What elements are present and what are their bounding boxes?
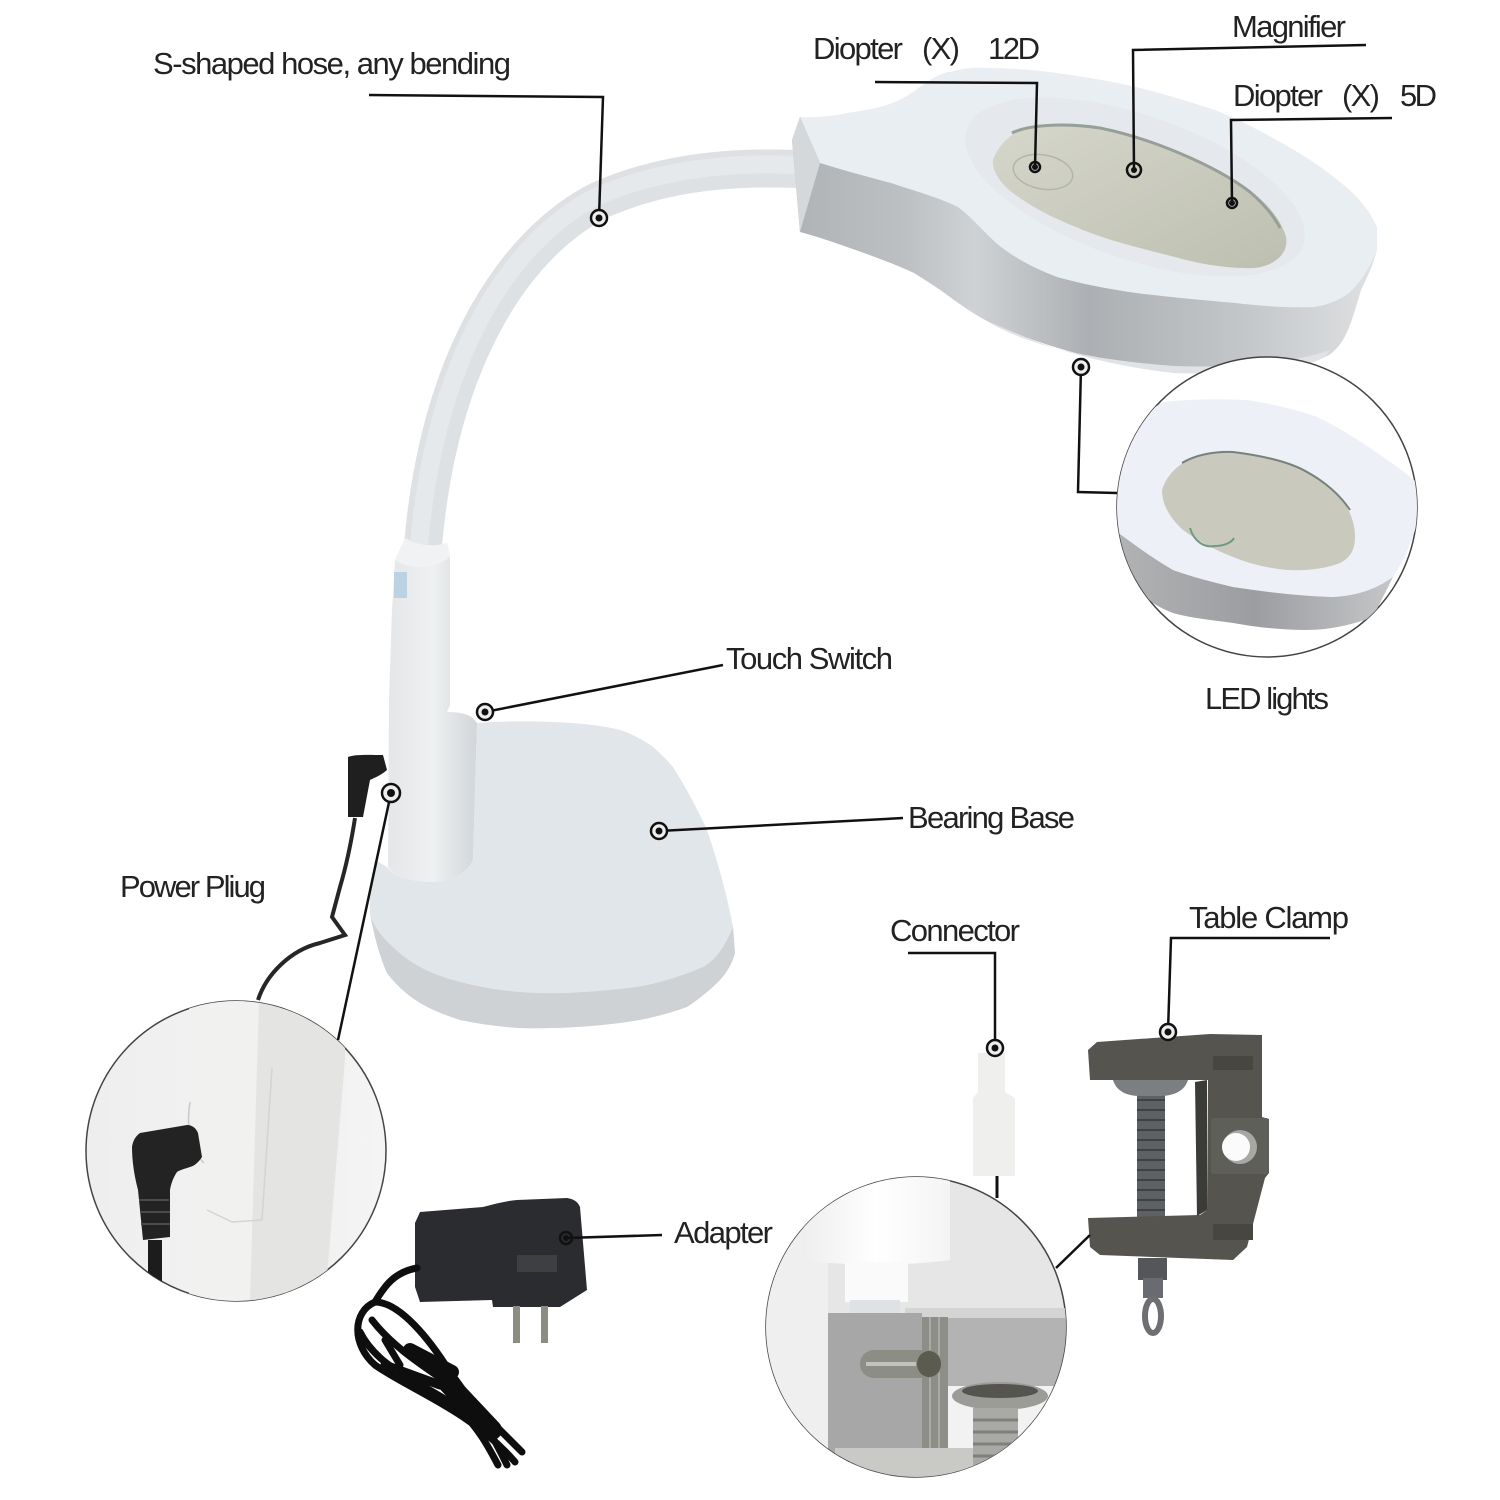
leader: Power Plug <box>338 784 400 1040</box>
power socket inset <box>86 1000 386 1302</box>
top surface <box>800 68 1377 307</box>
label: Magnifier: Magnifier <box>1232 9 1346 44</box>
sleeve <box>845 1262 908 1302</box>
main screw <box>1137 1093 1165 1218</box>
lens rim <box>1012 125 1280 228</box>
lens <box>993 124 1286 268</box>
label: Bearing Base: Bearing Base <box>908 800 1075 835</box>
leader: LED lights <box>1073 359 1117 493</box>
label: Diopter 12D: Diopter <box>813 31 903 66</box>
label: Diopter 5D <box>1233 78 1437 113</box>
label: Diopter 5D: (X) <box>1342 78 1380 113</box>
adapter cable <box>358 1268 522 1465</box>
lamp: magnifier head <box>792 61 1377 373</box>
LED lights inset <box>1112 357 1420 657</box>
left facet <box>792 117 820 232</box>
label: Table Clamp: Table Clamp <box>1189 900 1349 935</box>
rib <box>922 1317 948 1452</box>
left wall <box>766 1206 828 1448</box>
connector inset <box>766 1177 1070 1482</box>
white cylinder <box>803 1177 950 1264</box>
lamp: hose <box>419 164 800 545</box>
leader: Table Clamp <box>1160 938 1330 1040</box>
inset side face <box>1115 530 1393 630</box>
label: Diopter 5D: Diopter <box>1233 78 1323 113</box>
adapter <box>358 1198 587 1465</box>
lamp: bearing base <box>370 721 735 1028</box>
clamp body <box>1088 1034 1269 1260</box>
label: Diopter 12D: 12D <box>988 31 1040 66</box>
clamp top edge <box>905 1308 1070 1320</box>
inset plug <box>132 1125 202 1240</box>
label: Connector: Connector <box>890 913 1020 948</box>
lower lip <box>985 320 1330 373</box>
leader: Diopter 12D <box>875 82 1040 172</box>
label: Touch Switch: Touch Switch <box>726 641 893 676</box>
bottom frame <box>835 1448 974 1477</box>
leader: Magnifier <box>1127 45 1366 177</box>
label: Adapter: Adapter <box>674 1215 773 1250</box>
leader: Adapter <box>560 1232 662 1244</box>
label: Diopter 12D <box>813 31 1040 66</box>
label: Diopter 12D: (X) <box>922 31 960 66</box>
lamp: neck and post <box>388 538 477 882</box>
leader: Diopter 5D <box>1227 118 1392 208</box>
slot pin <box>860 1350 942 1378</box>
screw thread <box>973 1408 1018 1466</box>
leader: S-shaped hose <box>369 95 607 226</box>
table clamp <box>1088 1034 1269 1333</box>
lens recess <box>943 61 1327 313</box>
label: LED lights: LED lights <box>1205 681 1329 716</box>
right panel <box>948 1318 1068 1386</box>
leader: clamp to inset <box>1056 1235 1090 1268</box>
label: S-shaped hose: S-shaped hose, any bending <box>153 46 511 81</box>
clamp block <box>828 1313 922 1453</box>
post label <box>394 572 407 598</box>
inset lens <box>1162 452 1355 570</box>
power plug and cable <box>258 755 387 1000</box>
label: Power Plug: Power Pliug <box>120 869 266 904</box>
connector <box>973 1053 1015 1198</box>
leader: Bearing Base <box>651 818 903 839</box>
lower screw and ring <box>1138 1258 1167 1280</box>
inset top surface <box>1112 399 1420 597</box>
leader: Touch Switch <box>477 665 723 720</box>
label: Diopter 5D: 5D <box>1400 78 1437 113</box>
small 12D lens <box>1011 150 1075 194</box>
screw head <box>952 1382 1048 1410</box>
leader: Connector <box>908 953 1003 1056</box>
